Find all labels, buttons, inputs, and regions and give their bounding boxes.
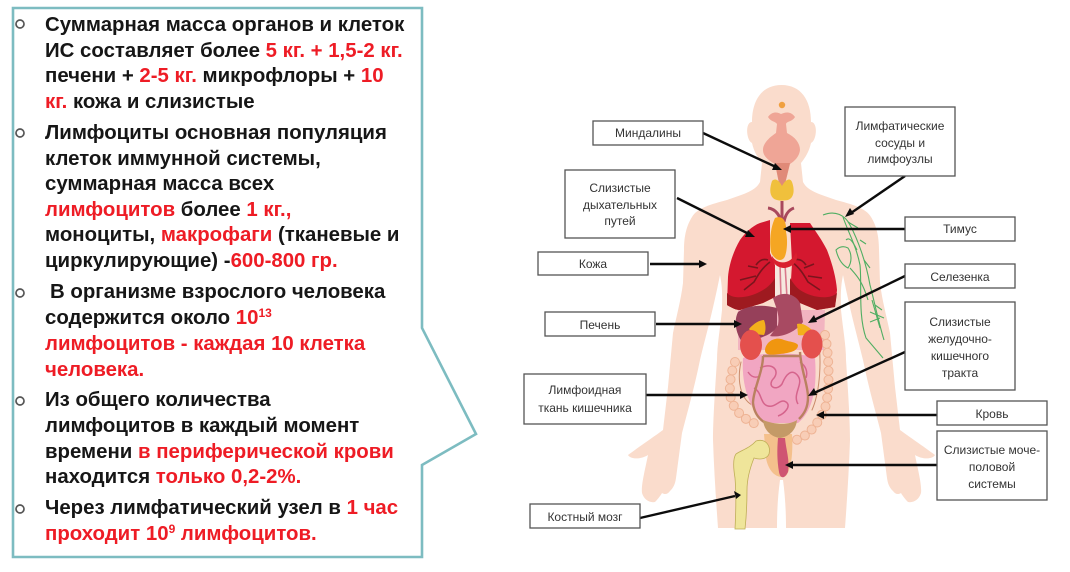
label: Слизистые дыхательных путей: дыхательных [583, 198, 657, 212]
bullet markers [16, 20, 24, 513]
spleen [797, 324, 813, 335]
heart [772, 252, 797, 268]
kidneys [740, 330, 822, 360]
organs [727, 102, 837, 529]
thymus [770, 217, 787, 260]
bladder [763, 420, 797, 438]
label: Кровь [937, 401, 1047, 425]
pancreas [765, 339, 798, 355]
large bowel tube [753, 352, 808, 422]
label: Слизистые желудочно-кишечного тракта [905, 302, 1015, 390]
abdomen background [738, 310, 825, 350]
intestine folds [748, 362, 807, 416]
arrow: Слизистые дыхательных путей [677, 198, 755, 237]
bullet 5 text [45, 497, 398, 545]
bullet 4 text: находится только 0,2-2%. [45, 466, 301, 488]
arrow: Костный мозг [640, 491, 741, 518]
label: Слизистые моче-половой системы: системы [968, 477, 1016, 491]
label: Кожа [538, 252, 648, 275]
bullet 3 text: 13 [258, 306, 272, 320]
arrow: Печень [656, 320, 742, 328]
label: Селезенка [905, 264, 1015, 288]
lymphatic vessels, right arm [823, 213, 884, 358]
bullet 1 text: Суммарная масса органов и клеток [45, 14, 405, 36]
label: Кожа: Кожа [579, 257, 607, 271]
bullet 1 text: печени + 2-5 кг. микрофлоры + 10 [45, 65, 384, 87]
label: Лимфатические сосуды и лимфоузлы: сосуды и [875, 136, 925, 150]
femur [734, 440, 769, 529]
label: Слизистые желудочно-кишечного тракта: тракта [942, 366, 978, 380]
arrow: Миндалины [703, 133, 782, 170]
small intestine [743, 354, 816, 423]
label: Лимфатические сосуды и лимфоузлы: Лимфатические [856, 119, 945, 133]
human body silhouette [628, 85, 935, 528]
text panel content [16, 14, 405, 545]
bullet 3 text: лимфоцитов - каждая 10 клетка [45, 333, 366, 355]
arrow: Кожа [650, 260, 707, 268]
bullet 4 text [45, 389, 394, 488]
label: Тимус: Тимус [943, 222, 977, 236]
label: Лимфоидная ткань кишечника: Лимфоидная [549, 383, 621, 397]
arrow: Слизистые мочеполовой системы [785, 461, 937, 469]
bullet 5 text: проходит 10 [45, 523, 169, 545]
label: Миндалины: Миндалины [615, 126, 681, 140]
bullet 1 text [45, 14, 405, 113]
label: Печень: Печень [580, 318, 620, 332]
label: Слизистые дыхательных путей [565, 170, 675, 238]
arrow: Селезенка [808, 276, 905, 323]
lungs [727, 220, 837, 310]
label: Печень [545, 312, 655, 336]
bullet 5 text: лимфоцитов. [175, 523, 317, 545]
arrow: Лимфатические сосуды [845, 176, 905, 217]
bullet 1 text: кг. кожа и слизистые [45, 91, 255, 113]
label: Лимфоидная ткань кишечника: ткань кишечника [538, 401, 632, 415]
label: Слизистые желудочно-кишечного тракта: кишечного [931, 349, 989, 363]
head glands and pharynx [763, 102, 800, 188]
trachea vessels [768, 201, 794, 222]
label: Кровь: Кровь [976, 407, 1008, 421]
label: Селезенка: Селезенка [930, 270, 990, 284]
label: Слизистые желудочно-кишечного тракта: Слизистые [929, 315, 991, 329]
label: Слизистые дыхательных путей: Слизистые [589, 181, 651, 195]
stomach [770, 294, 803, 336]
thyroid [770, 179, 794, 201]
bullet 3 text: человека. [45, 359, 144, 381]
panel: text callout outline [13, 8, 476, 557]
bullet 4 text: лимфоцитов в каждый момент [45, 415, 359, 437]
label: Слизистые дыхательных путей: путей [604, 214, 636, 228]
arrow: Слизистые ЖКТ [808, 352, 905, 396]
adrenal gland [749, 320, 766, 335]
label: Слизистые моче-половой системы: половой [969, 460, 1015, 474]
arrow: Тимус [783, 225, 905, 233]
label: Слизистые моче-половой системы [937, 431, 1047, 500]
bullet 4 text: времени в периферической крови [45, 441, 394, 463]
bullet 1 text: ИС составляет более 5 кг. + 1,5-2 кг. [45, 40, 403, 62]
bullet 2 text: лимфоцитов более 1 кг., [45, 199, 291, 221]
bullet 3 text: содержится около 10 [45, 307, 258, 329]
arrow: Лимфоидная ткань [646, 391, 748, 399]
label: Лимфатические сосуды и лимфоузлы: лимфоузлы [867, 152, 933, 166]
label: Тимус [905, 217, 1015, 241]
bullet 4 text: Из общего количества [45, 389, 271, 411]
bullet 2 text: Лимфоциты основная популяция [45, 122, 387, 144]
bullet 5 text: 9 [169, 522, 176, 536]
colon bead chains [730, 335, 829, 440]
label: Слизистые желудочно-кишечного тракта: желудочно- [928, 332, 992, 346]
label: Лимфатические сосуды и лимфоузлы [845, 107, 955, 176]
bullet 5 text: Через лимфатический узел в 1 час [45, 497, 398, 519]
label: Костный мозг: Костный мозг [547, 510, 623, 524]
bullet 2 text: суммарная масса всех [45, 173, 275, 195]
label: Костный мозг [530, 504, 640, 528]
label: Лимфоидная ткань кишечника [524, 374, 646, 424]
bullet 3 text: В организме взрослого человека [50, 281, 386, 303]
bullet 2 text: циркулирующие) -600-800 гр. [45, 250, 338, 272]
liver [736, 306, 777, 342]
arrow: Кровь [816, 411, 937, 419]
bullet 3 text [45, 281, 386, 381]
bullet 2 text [45, 122, 399, 272]
label: Слизистые моче-половой системы: Слизистые моче- [944, 443, 1040, 457]
pelvic organs [764, 434, 792, 477]
bullet 2 text: клеток иммунной системы, [45, 148, 321, 170]
label: Миндалины [593, 121, 703, 145]
bullet 2 text: моноциты, макрофаги (тканевые и [45, 224, 399, 246]
